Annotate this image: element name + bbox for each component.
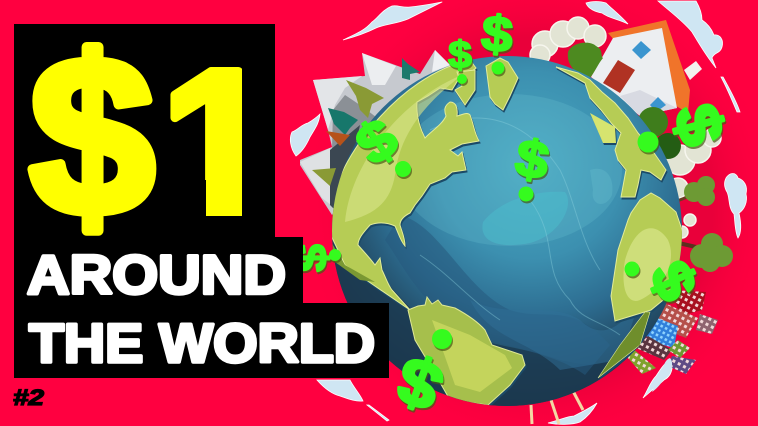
cream cloud bank behind the house [530, 17, 721, 238]
cloud in front of buildings [652, 358, 672, 392]
dollar: ocean: $ [511, 128, 553, 191]
cloud: thin strip right [721, 77, 740, 112]
continent: small northern island [455, 70, 475, 105]
cloud: lower right [643, 360, 672, 398]
dollar: top small: $ [448, 33, 472, 76]
continents [326, 58, 690, 405]
scenery: mountains and trees on the upper left [300, 50, 470, 215]
tree: right lower [670, 233, 733, 272]
headline amount [27, 42, 242, 236]
cloud: right of house [658, 1, 723, 68]
house [591, 20, 702, 116]
window [632, 41, 651, 59]
globe [326, 56, 690, 420]
tree: right upper [672, 176, 715, 206]
bush: dark [655, 133, 681, 159]
dollar: by the house: $ [661, 97, 738, 152]
pine trees [312, 58, 420, 186]
window lower [650, 97, 666, 112]
headline amount: $ [29, 10, 155, 262]
dollar: partly hidden at left: $ [287, 244, 336, 272]
cloud: left of mountains [290, 114, 320, 156]
ocean contour layers [330, 94, 640, 420]
continent: southern sliver [598, 312, 650, 378]
roof [608, 20, 690, 113]
continent: Africa-like right land [611, 193, 690, 321]
cloud: top right small [586, 2, 628, 24]
cloud: thin strip lower left [367, 405, 389, 421]
cloud: right middle [725, 174, 747, 238]
chimney [684, 61, 702, 80]
bush: below house [638, 107, 668, 137]
bush: left of house [568, 43, 603, 78]
dollar: right continent: $ [638, 252, 710, 310]
wall [591, 28, 677, 116]
dollar: top large: $ [479, 5, 515, 64]
episode number: #2 [13, 385, 45, 410]
continent: Greenland [486, 58, 518, 110]
headline: the world: THE WORLD [29, 312, 375, 374]
city buildings [628, 290, 718, 374]
continent: Asia strip [556, 67, 666, 197]
mountains [300, 50, 470, 215]
green dollar signs [287, 5, 738, 425]
dollar: South America: $ [388, 342, 452, 425]
clouds behind the planet [290, 1, 747, 424]
door [603, 60, 635, 93]
island east [590, 113, 616, 143]
continent: north and central America [326, 60, 479, 310]
headline amount: 1 [161, 26, 277, 261]
dollar: North America: $ [344, 105, 409, 177]
black title panel [14, 24, 389, 378]
poles below the globe [531, 391, 583, 424]
cloud: top centre [343, 2, 442, 40]
land highlights [330, 75, 671, 392]
headline: around: AROUND [27, 244, 286, 306]
title block [14, 10, 389, 378]
continent: South America [408, 297, 525, 405]
cloud: bottom [548, 403, 597, 424]
bushes and trees [568, 43, 733, 272]
ocean [332, 56, 682, 406]
cloud: lower left [317, 380, 363, 401]
